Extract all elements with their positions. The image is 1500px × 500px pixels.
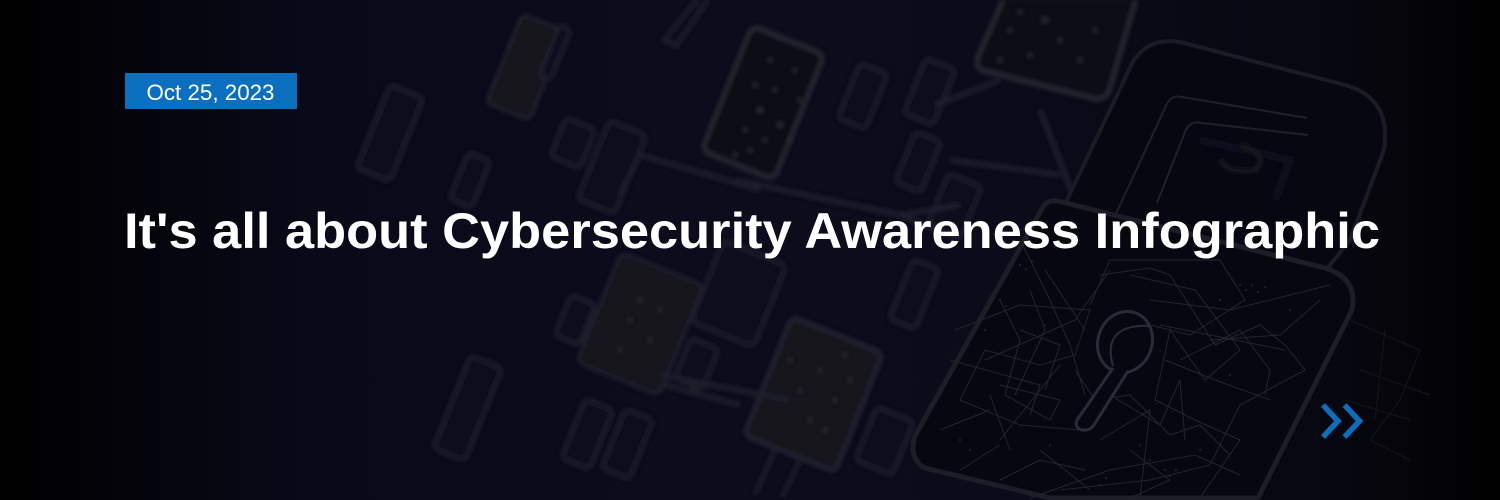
- date badge: [125, 73, 297, 109]
- icon: double chevron arrow: [1323, 405, 1360, 437]
- circuit board dot textures: [617, 9, 1098, 433]
- date badge: Oct 25, 2023: [146, 80, 274, 105]
- title: It's all about Cybersecurity Awareness Infographic: [124, 203, 1380, 259]
- illustration: upper phone outline: [1067, 41, 1385, 290]
- keyhole: [1076, 304, 1161, 430]
- circuit dots: [959, 260, 1291, 486]
- background: blurred padlock network: [356, 0, 1136, 497]
- illustration: lower phone with keyhole: [913, 201, 1353, 498]
- circuit traces: [940, 240, 1330, 498]
- right edge faint circuit: [1345, 320, 1430, 460]
